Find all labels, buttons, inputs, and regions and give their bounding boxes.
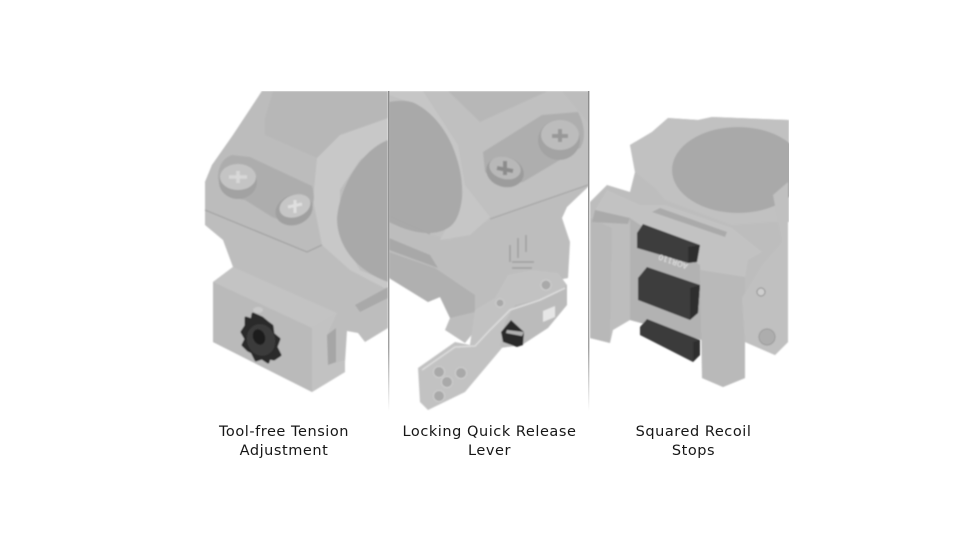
engraved model text: AOR110 [657,252,689,271]
screw head top [538,120,580,160]
ring top flat [265,91,388,158]
mount body [204,210,388,364]
rail groove shadow [592,210,630,224]
caption: tension adjustment: Adjustment [240,443,328,459]
ring seam [428,184,588,234]
tension knob [242,314,280,362]
rail slot [327,328,336,365]
clamp block front [213,282,312,392]
caption: quick release lever: Locking Quick Release [403,424,576,440]
caption: tension adjustment: Tool-free Tension [218,424,349,440]
caption: recoil stops: Stops [672,443,715,459]
divider left [388,91,389,411]
screw head right [276,194,313,226]
lever arm [418,270,567,410]
hinge window [543,306,555,322]
lever hinge block [500,284,568,348]
rail groove [389,238,438,268]
caption: recoil stops: Squared Recoil [636,424,751,440]
lever highlight [422,288,565,370]
rail channel [355,287,388,312]
lever rivets [434,280,551,402]
lever rivet [759,329,775,345]
ring seam [205,210,322,252]
recoil stop bottom [640,319,700,362]
tube bore [672,127,804,213]
clamp block top [213,267,337,328]
ring top flat [452,92,541,120]
caption: quick release lever: Lever [468,443,511,459]
ring light band [313,118,388,290]
recoil stop middle [638,267,700,320]
tube bore [389,101,462,233]
screw head bottom [486,158,524,188]
mount body [389,91,590,343]
ring face [389,91,590,240]
panel: tension adjustment [205,91,388,392]
ring top face [205,91,388,252]
clamp block side [312,313,345,392]
screw recess [218,155,314,220]
screw head left [219,164,257,199]
panel: recoil stops [590,117,804,387]
panel: quick release lever [389,91,590,410]
rail top [595,190,762,277]
lever latch button [501,320,524,347]
divider right [588,91,589,411]
ring top face [787,120,789,222]
screw recess [483,112,584,185]
central recess [630,218,702,340]
rail side [389,252,475,318]
mount body [590,172,782,342]
knob mark [253,307,263,313]
ring light band [462,228,475,235]
rail slot [652,208,727,237]
right block [700,270,745,387]
left flange [590,218,612,343]
tube bore [337,140,388,282]
embossed logo [510,235,534,268]
side lever [742,182,788,355]
lever pivot pin [757,288,765,296]
recoil stop top [637,224,700,263]
infographic [204,91,789,458]
